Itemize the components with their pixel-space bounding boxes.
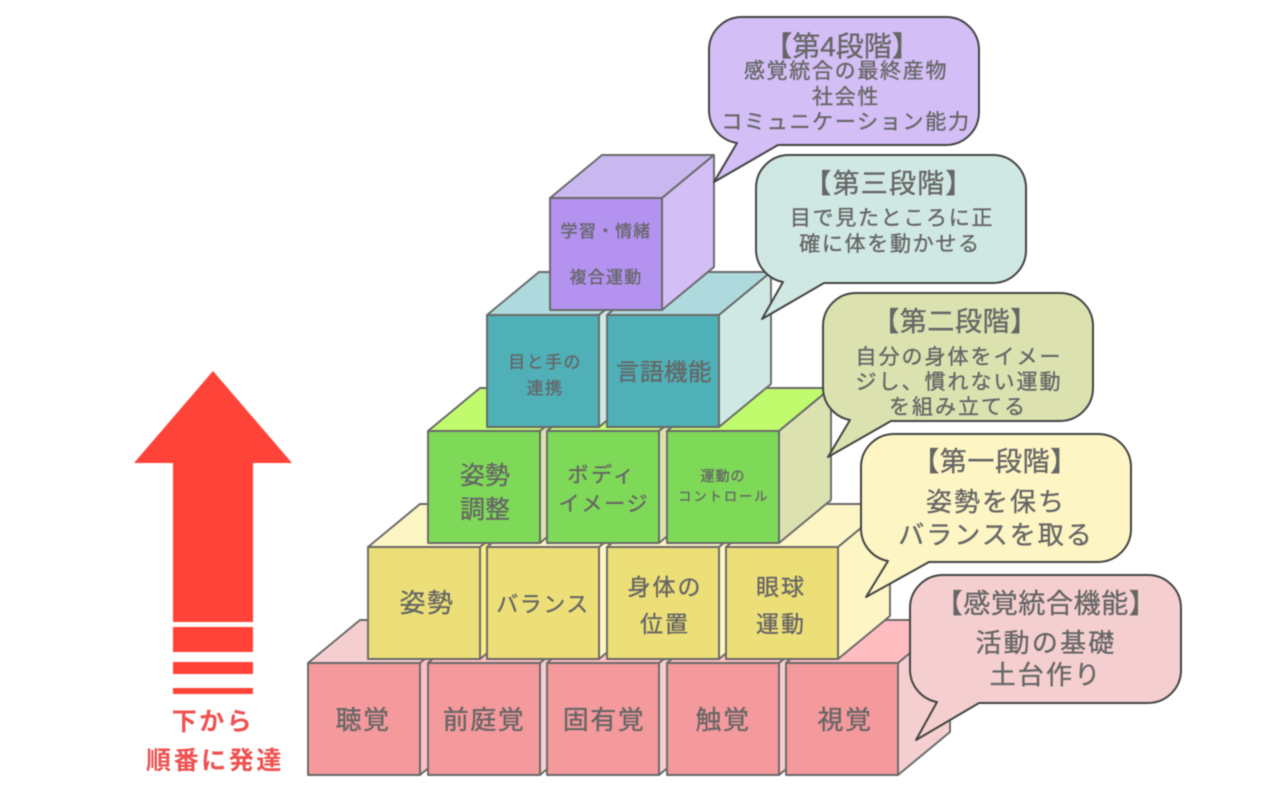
- callout: 第4段階: 社会性: [812, 86, 880, 109]
- arrow caption: 下から: [172, 708, 254, 736]
- cube: 視覚: 視覚: [817, 705, 873, 735]
- arrow caption: [146, 708, 284, 775]
- callout: 第三段階: [756, 155, 1026, 319]
- row 5: fourth stage (purple): [550, 155, 714, 310]
- row 3: second stage (green): [428, 388, 831, 543]
- callout: 第二段階: ジし、慣れない運動: [856, 371, 1062, 394]
- row 2: first stage (yellow): [368, 504, 890, 659]
- arrow caption: 順番に発達: [146, 747, 284, 775]
- cube: 目と手の連携: [487, 272, 651, 427]
- cube: 聴覚: [308, 620, 472, 775]
- cube: 姿勢: [368, 504, 532, 659]
- cube: 目と手の連携: 目と手の: [508, 353, 582, 372]
- cube: 視覚: [786, 620, 950, 775]
- cube: 身体の位置: 身体の: [628, 574, 702, 600]
- cube: 姿勢: 姿勢: [399, 588, 455, 618]
- callout: 第一段階: バランスを取る: [898, 520, 1094, 550]
- callout: 第二段階: [823, 293, 1093, 457]
- callout: 感覚統合機能: 活動の基礎: [975, 628, 1117, 658]
- arrow: development direction: [134, 371, 292, 694]
- cube: 身体の位置: 位置: [640, 611, 690, 637]
- cube: 触覚: [667, 620, 831, 775]
- callout: 第三段階: 確に体を動かせる: [799, 233, 981, 256]
- cube: 学習・情緒 複合運動: [550, 155, 714, 310]
- callout: 第4段階: 感覚統合の最終産物: [744, 60, 948, 83]
- cube: 固有覚: [547, 620, 711, 775]
- callout: 第4段階: 【第4段階】: [764, 31, 920, 62]
- cube: 姿勢調整: 姿勢: [460, 462, 510, 490]
- cube: 運動のコントロール: コントロール: [678, 489, 770, 504]
- cube: ボディイメージ: イメージ: [559, 493, 649, 516]
- cube: ボディイメージ: [547, 388, 711, 543]
- row 1: senses (pink): [308, 620, 950, 775]
- cube: 運動のコントロール: 運動の: [700, 468, 746, 484]
- cube: 学習・情緒 複合運動: 学習・情緒: [560, 222, 652, 241]
- callout: 第二段階: を組み立てる: [889, 396, 1027, 419]
- callout: 感覚統合機能: [910, 575, 1181, 740]
- cube: 眼球運動: 眼球: [756, 574, 806, 600]
- callout: 第4段階: コミュニケーション能力: [721, 111, 971, 134]
- cube: 言語機能: 言語機能: [616, 359, 712, 385]
- callout: 第三段階: 目で見たところに正: [790, 207, 994, 230]
- cube: 固有覚: 固有覚: [563, 705, 645, 735]
- cube: 姿勢調整: [428, 388, 592, 543]
- callout: 感覚統合機能: 【感覚統合機能】: [936, 589, 1156, 619]
- callout: 第三段階: 【第三段階】: [804, 169, 974, 199]
- callout: 第4段階: [709, 17, 979, 182]
- cube: バランス: バランス: [496, 592, 590, 617]
- cube: 眼球運動: 運動: [756, 611, 806, 637]
- cube: 学習・情緒 複合運動: 複合運動: [570, 268, 642, 287]
- callout: 第一段階: 姿勢を保ち: [926, 487, 1066, 517]
- callout: 第一段階: 【第一段階】: [912, 447, 1078, 477]
- cube: ボディイメージ: ボディ: [567, 464, 637, 487]
- callout: 第二段階: 【第二段階】: [872, 307, 1038, 337]
- cube: 触覚: 触覚: [695, 705, 751, 735]
- cube: 目と手の連携: 連携: [527, 379, 563, 398]
- cube: 姿勢調整: 調整: [460, 496, 510, 524]
- cube: バランス: [487, 504, 651, 659]
- cube: 前庭覚: 前庭覚: [443, 705, 525, 735]
- cube: 聴覚: 聴覚: [335, 705, 391, 735]
- row 4: third stage (teal): [487, 272, 771, 427]
- callout: 第二段階: 自分の身体をイメー: [856, 346, 1062, 369]
- cube: 眼球運動: [726, 504, 890, 659]
- cube: 前庭覚: [428, 620, 592, 775]
- cube: 言語機能: [607, 272, 771, 427]
- cube: 運動のコントロール: [667, 388, 831, 543]
- cube: 身体の位置: [607, 504, 771, 659]
- callout: 感覚統合機能: 土台作り: [990, 660, 1102, 690]
- callout: 第一段階: [861, 434, 1131, 597]
